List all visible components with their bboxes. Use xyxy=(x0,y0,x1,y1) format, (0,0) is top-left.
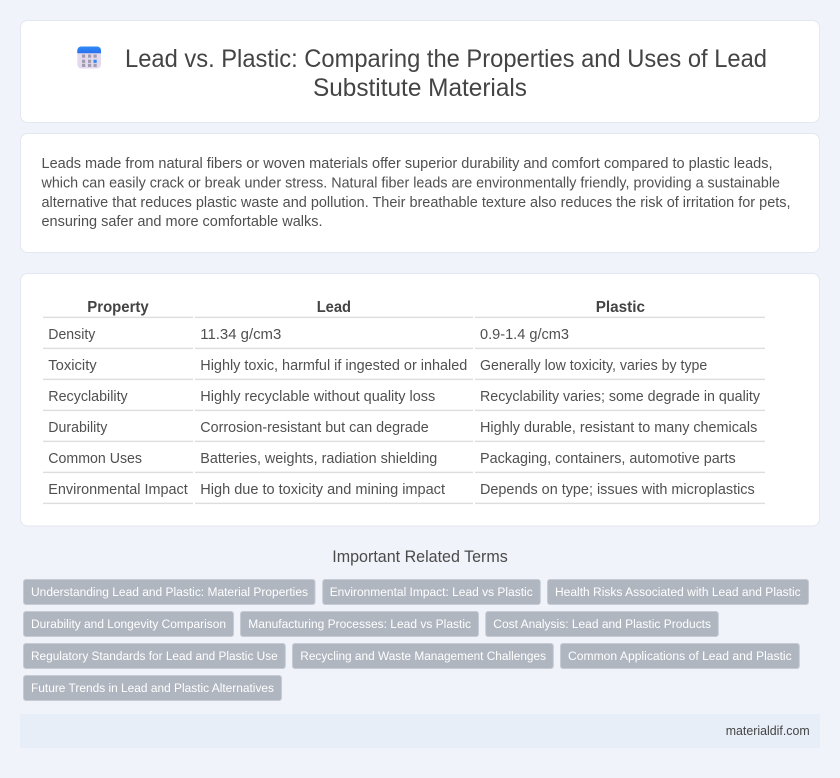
text block: summary: ensuring safer and more comfortable walks. xyxy=(42,214,322,230)
table row: environmental impact xyxy=(43,482,765,504)
tag: Durability and Longevity Comparison xyxy=(31,617,226,631)
table row: toxicity: Generally low toxicity, varies by type xyxy=(480,358,707,374)
tag: Cost Analysis: Lead and Plastic Products xyxy=(493,617,711,631)
table row: durability xyxy=(43,420,765,442)
table row: recyclability: Highly recyclable without quality loss xyxy=(200,389,435,405)
tag xyxy=(240,612,478,636)
table row: common uses xyxy=(43,451,765,473)
table row: common uses: Common Uses xyxy=(48,451,142,467)
table row: common uses: Batteries, weights, radiation shielding xyxy=(200,451,437,467)
tag xyxy=(24,644,285,668)
table row: toxicity: Toxicity xyxy=(48,358,98,374)
table row: environmental impact: Environmental Impact xyxy=(48,482,188,498)
table row: toxicity: Highly toxic, harmful if ingested or inhaled xyxy=(200,358,467,374)
text block: summary xyxy=(41,156,790,230)
title xyxy=(125,46,767,102)
table header row: Property xyxy=(87,299,149,316)
table row: density: Density xyxy=(48,327,96,343)
panel: summary paragraph xyxy=(20,134,820,252)
table row: recyclability: Recyclability xyxy=(48,389,128,405)
text block: summary: alternative that reduces plastic waste and pollution. Their breathable texture also reduces the risk of irritation for pets, xyxy=(42,195,790,211)
tag xyxy=(24,612,234,636)
table header row xyxy=(43,299,765,318)
tag xyxy=(24,580,315,604)
heading: related terms: Important Related Terms xyxy=(332,548,508,566)
table row: durability: Highly durable, resistant to many chemicals xyxy=(480,420,757,436)
tag: Common Applications of Lead and Plastic xyxy=(568,649,792,663)
tag: Recycling and Waste Management Challenges xyxy=(300,649,546,663)
tag: Regulatory Standards for Lead and Plastic Use xyxy=(31,649,278,663)
table row: density: 11.34 g/cm3 xyxy=(200,327,281,343)
tag list: related terms xyxy=(24,580,808,700)
tag xyxy=(560,644,799,668)
table row: density: 0.9-1.4 g/cm3 xyxy=(480,327,569,343)
panel: title header xyxy=(20,20,820,122)
tag: Environmental Impact: Lead vs Plastic xyxy=(330,585,533,599)
icon: calendar xyxy=(77,46,101,68)
tag: Understanding Lead and Plastic: Material Properties xyxy=(31,585,308,599)
table row: durability: Durability xyxy=(48,420,108,436)
table row: environmental impact: Depends on type; issues with microplastics xyxy=(480,482,755,498)
table row: density xyxy=(43,327,765,349)
tag xyxy=(548,580,808,604)
tag: Future Trends in Lead and Plastic Alternatives xyxy=(31,681,274,695)
title: Substitute Materials xyxy=(313,75,527,102)
footer bar xyxy=(20,714,820,748)
title: Lead vs. Plastic: Comparing the Properties and Uses of Lead xyxy=(125,46,767,73)
table header row: Plastic xyxy=(596,299,645,316)
tag: Manufacturing Processes: Lead vs Plastic xyxy=(248,617,471,631)
table row: toxicity xyxy=(43,358,765,380)
table row: recyclability xyxy=(43,389,765,411)
table row: recyclability: Recyclability varies; some degrade in quality xyxy=(480,389,761,405)
tag xyxy=(486,612,718,636)
table row: environmental impact: High due to toxicity and mining impact xyxy=(200,482,445,498)
footer bar: materialdif.com xyxy=(726,723,810,738)
table row: durability: Corrosion-resistant but can degrade xyxy=(200,420,429,436)
tag: Health Risks Associated with Lead and Plastic xyxy=(555,585,801,599)
tag xyxy=(24,676,282,700)
table header row: Lead xyxy=(317,299,351,316)
tag xyxy=(292,644,553,668)
text block: summary: which can easily crack or break under stress. Natural fiber leads are environmentally friendly, providing a sustainable xyxy=(41,176,780,192)
panel: comparison table xyxy=(20,274,820,526)
table row: common uses: Packaging, containers, automotive parts xyxy=(480,451,736,467)
text block: summary: Leads made from natural fibers or woven materials offer superior durability and comfort compared to plastic leads, xyxy=(42,156,772,172)
tag xyxy=(323,580,540,604)
